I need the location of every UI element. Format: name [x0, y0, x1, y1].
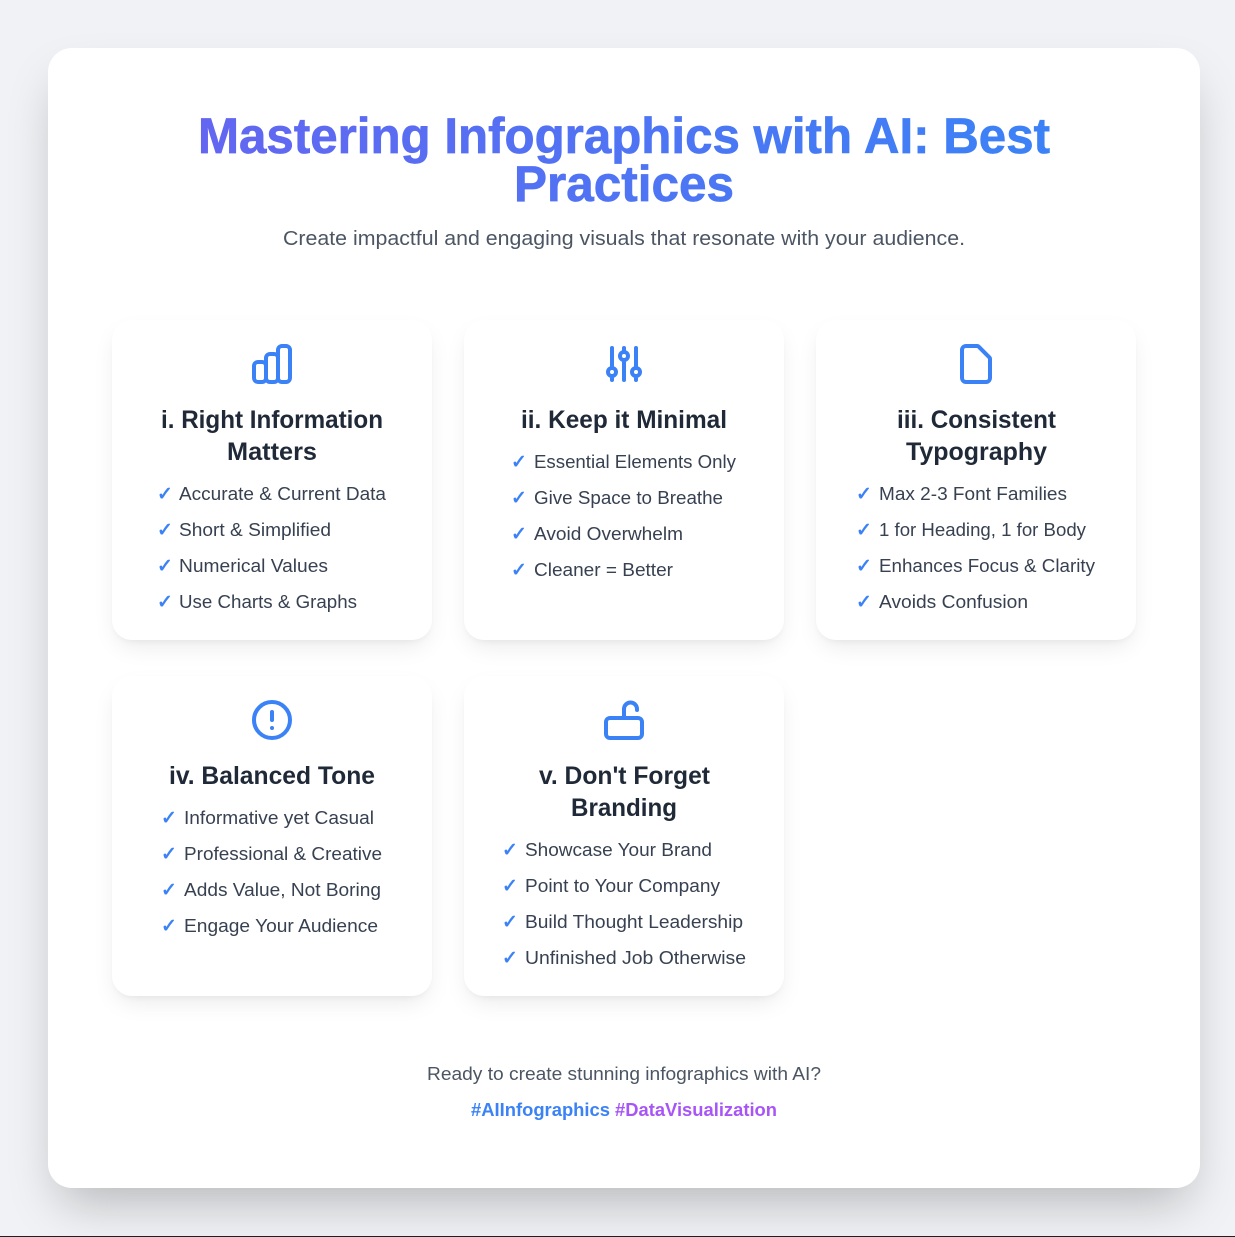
checklist: Accurate & Current Data — [179, 484, 387, 504]
heading: i. Right Information — [161, 406, 383, 434]
checklist: ✓ — [856, 483, 872, 505]
title line 1: Mastering Infographics with AI: Best — [198, 108, 1050, 164]
checklist — [161, 807, 382, 937]
heading: iii. Consistent — [897, 406, 1057, 434]
checklist: Avoids Confusion — [879, 592, 1028, 612]
checklist: Max 2-3 Font Families — [879, 484, 1067, 504]
title line 2: Practices — [514, 156, 734, 212]
checklist — [511, 451, 736, 581]
checklist: ✓ — [161, 843, 177, 865]
icon: open lock — [606, 702, 642, 738]
checklist: ✓ — [511, 451, 527, 473]
checklist: Give Space to Breathe — [534, 488, 723, 508]
checklist: Enhances Focus & Clarity — [879, 556, 1095, 576]
panel: iv. Balanced Tone — [112, 676, 432, 996]
heading: Matters — [227, 438, 317, 466]
checklist: Build Thought Leadership — [525, 912, 743, 932]
heading: ii. Keep it Minimal — [521, 406, 727, 434]
checklist: ✓ — [856, 519, 872, 541]
checklist: Numerical Values — [179, 556, 328, 576]
heading — [539, 762, 711, 822]
checklist: Point to Your Company — [525, 876, 720, 896]
checklist: Showcase Your Brand — [525, 840, 712, 860]
checklist: ✓ — [856, 591, 872, 613]
heading: Branding — [571, 794, 677, 822]
checklist: ✓ — [157, 591, 173, 613]
panel: i. Right Information Matters — [112, 320, 432, 640]
icon: exclamation circle — [254, 702, 290, 738]
checklist: Adds Value, Not Boring — [184, 880, 381, 900]
call to action: Ready to create stunning infographics with AI? — [427, 1064, 821, 1084]
checklist: ✓ — [157, 519, 173, 541]
checklist: ✓ — [161, 879, 177, 901]
checklist: 1 for Heading, 1 for Body — [879, 520, 1086, 540]
checklist — [157, 483, 387, 613]
checklist: Professional & Creative — [184, 844, 382, 864]
panel: v. Don't Forget Branding — [464, 676, 784, 996]
heading: Typography — [906, 438, 1047, 466]
heading: v. Don't Forget — [539, 762, 711, 790]
panel: ii. Keep it Minimal — [464, 320, 784, 640]
subtitle: Create impactful and engaging visuals that resonate with your audience. — [283, 228, 965, 250]
checklist: ✓ — [511, 487, 527, 509]
icon: document — [962, 346, 990, 382]
checklist: ✓ — [502, 911, 518, 933]
heading — [161, 406, 383, 466]
icon: sliders — [608, 348, 640, 380]
checklist — [856, 483, 1095, 613]
checklist: ✓ — [856, 555, 872, 577]
checklist: Short & Simplified — [179, 520, 331, 540]
panel: iii. Consistent Typography — [816, 320, 1136, 640]
footer: call to action and hashtags — [427, 1064, 821, 1120]
checklist — [502, 839, 746, 969]
checklist: Informative yet Casual — [184, 808, 374, 828]
hashtag: AI infographics: #AIInfographics — [471, 1100, 610, 1120]
checklist: Use Charts & Graphs — [179, 592, 357, 612]
checklist: Engage Your Audience — [184, 916, 378, 936]
hashtag: data visualization: #DataVisualization — [615, 1100, 777, 1120]
checklist: Unfinished Job Otherwise — [525, 948, 746, 968]
icon: bar chart — [254, 346, 290, 382]
checklist: ✓ — [502, 839, 518, 861]
heading: iv. Balanced Tone — [169, 762, 375, 790]
checklist: ✓ — [511, 559, 527, 581]
checklist: ✓ — [161, 915, 177, 937]
checklist: ✓ — [502, 875, 518, 897]
checklist: Avoid Overwhelm — [534, 524, 683, 544]
checklist: ✓ — [161, 807, 177, 829]
checklist: Essential Elements Only — [534, 452, 736, 472]
checklist: ✓ — [157, 555, 173, 577]
header: title and subtitle — [198, 108, 1050, 250]
checklist: ✓ — [502, 947, 518, 969]
heading — [897, 406, 1057, 466]
checklist: ✓ — [157, 483, 173, 505]
checklist: Cleaner = Better — [534, 560, 673, 580]
checklist: ✓ — [511, 523, 527, 545]
